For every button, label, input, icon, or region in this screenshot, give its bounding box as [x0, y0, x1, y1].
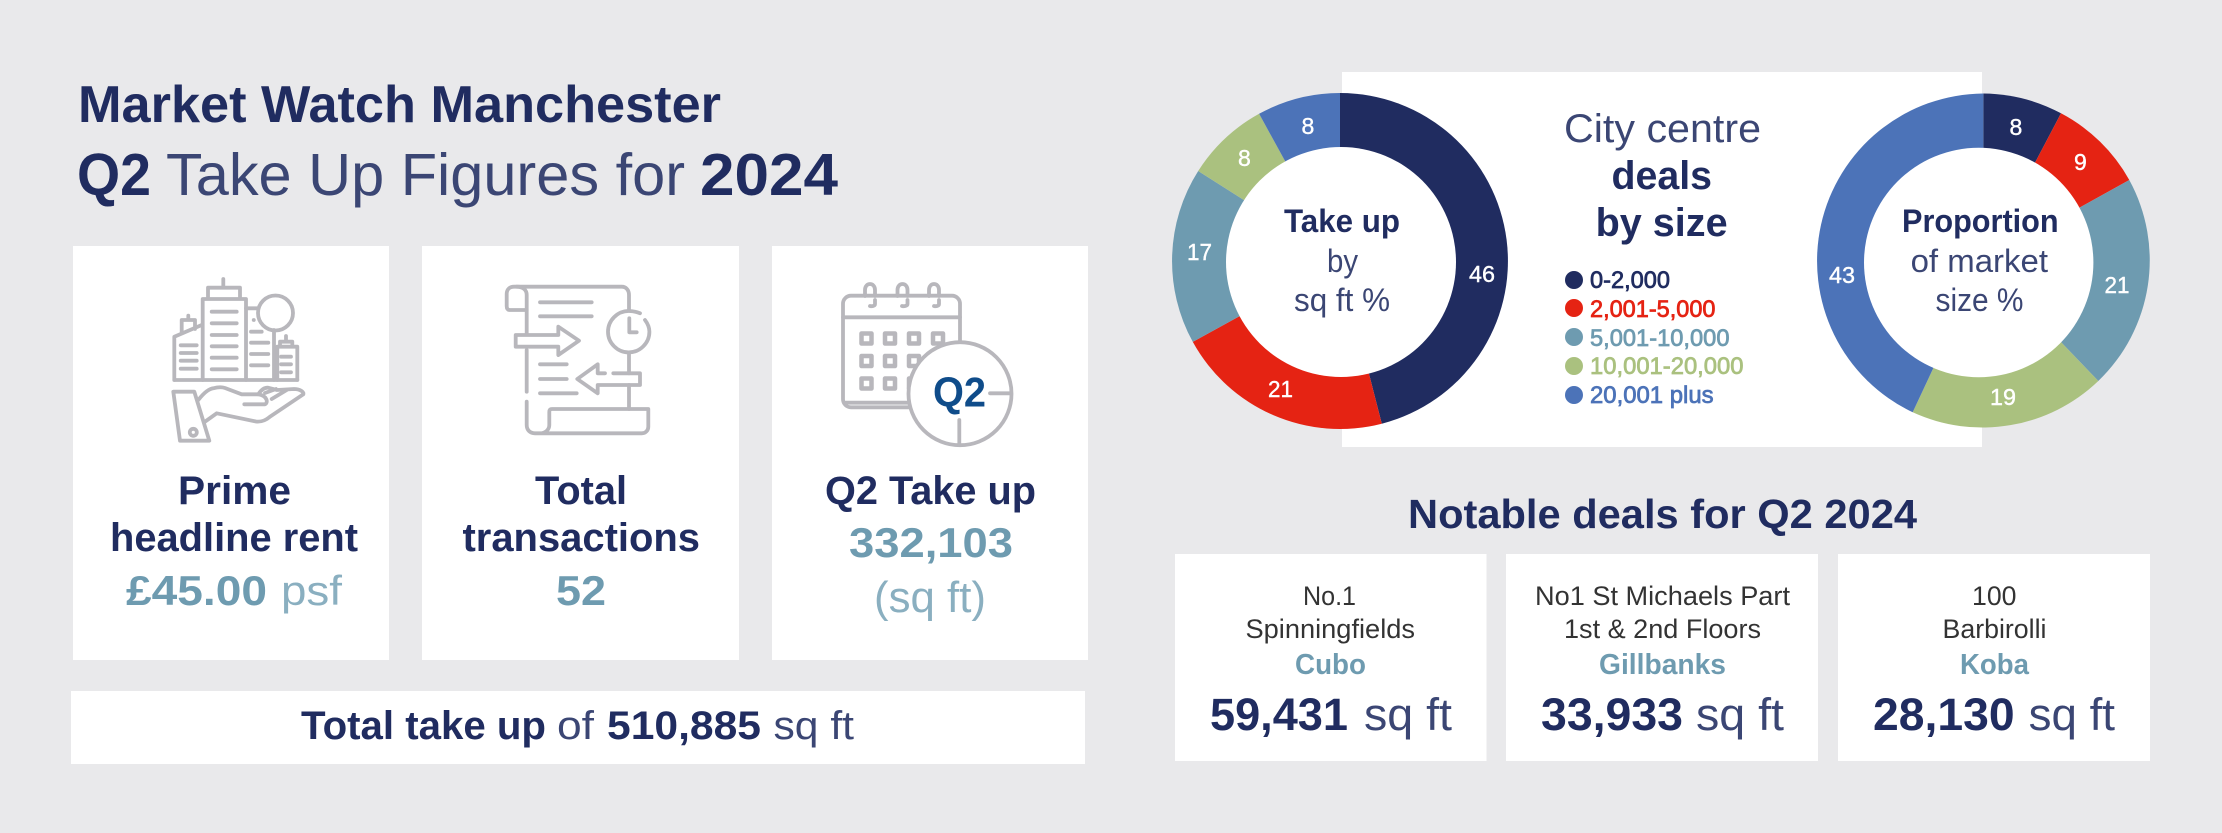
- heading: city centre deals by size: by size: [1596, 201, 1728, 245]
- donut chart: proportion of market size %: 8: [2010, 114, 2022, 140]
- icon: scroll with arrows and clock: [507, 287, 649, 433]
- donut chart: proportion of market size %: 43: [1829, 262, 1855, 288]
- icon: calendar with Q2 clock: [843, 284, 1012, 445]
- panel: prime headline rent: psf: [281, 567, 342, 614]
- panel: prime headline rent: headline rent: [110, 516, 358, 560]
- donut chart: proportion of market size %: [1817, 94, 2150, 428]
- icon: buildings on hand: [173, 279, 303, 441]
- panel: deal No.1 Spinningfields: No.1: [1303, 581, 1356, 611]
- legend: 10,001-20,000: [1590, 353, 1744, 380]
- legend: 5,001-10,000: [1590, 325, 1730, 352]
- donut chart: take up by sq ft %: 8: [1302, 113, 1314, 139]
- panel: deal No.1 Spinningfields: 59,431: [1210, 689, 1348, 740]
- panel: deal 100 Barbirolli: Barbirolli: [1942, 614, 2046, 644]
- panel: deal No.1 Spinningfields: Cubo: [1295, 649, 1366, 681]
- donut chart: take up by sq ft %: [1172, 93, 1508, 429]
- panel: Q2 take up: 332,103: [849, 519, 1013, 566]
- panel: prime headline rent: Prime: [178, 469, 291, 513]
- legend: [1565, 267, 1744, 409]
- panel: deal No1 St Michaels: sq ft: [1696, 689, 1785, 740]
- panel: deal No1 St Michaels: 1st & 2nd Floors: [1564, 614, 1761, 644]
- legend: 20,001 plus: [1590, 382, 1714, 409]
- donut chart: proportion of market size %: 19: [1990, 384, 2016, 410]
- panel: deal No.1 Spinningfields: Spinningfields: [1246, 614, 1415, 644]
- panel: Q2 take up: [772, 246, 1088, 660]
- panel: deal 100 Barbirolli: [1838, 554, 2150, 761]
- donut chart: take up by sq ft %: 17: [1187, 239, 1212, 265]
- title: Take Up Figures for: [166, 142, 685, 208]
- title: 2024: [700, 142, 838, 208]
- title: [77, 76, 838, 208]
- panel: deal No.1 Spinningfields: [1175, 554, 1486, 761]
- title: Q2: [77, 142, 151, 208]
- donut chart: proportion of market size %: 21: [2104, 272, 2130, 298]
- panel: Q2 take up: Q2: [933, 369, 986, 416]
- panel: deal No.1 Spinningfields: sq ft: [1364, 689, 1453, 740]
- legend: 2,001-5,000: [1590, 296, 1716, 323]
- panel: total transactions: [422, 246, 739, 660]
- heading: notable deals: Notable deals for Q2 2024: [1408, 491, 1917, 537]
- donut chart: proportion of market size %: Proportion: [1902, 203, 2059, 239]
- donut chart: take up by sq ft %: 21: [1268, 376, 1293, 402]
- donut chart: proportion of market size %: 9: [2074, 149, 2087, 175]
- total take up banner: 510,885: [607, 704, 761, 748]
- donut chart: take up by sq ft %: by: [1327, 243, 1358, 279]
- panel: deal 100 Barbirolli: sq ft: [2029, 689, 2115, 740]
- donut chart: take up by sq ft %: 8: [1238, 145, 1251, 171]
- panel: total transactions: Total: [535, 469, 627, 513]
- donut chart: take up by sq ft %: Take up: [1284, 203, 1400, 239]
- panel: prime headline rent: £45.00: [126, 567, 267, 614]
- total take up banner: Total take up: [301, 704, 546, 748]
- panel: deal 100 Barbirolli: 100: [1972, 581, 2016, 611]
- donut chart: take up by sq ft %: 46: [1469, 261, 1495, 287]
- panel: deal No1 St Michaels: Gillbanks: [1599, 649, 1726, 681]
- donut chart: take up by sq ft %: sq ft %: [1294, 282, 1390, 318]
- panel: deal No1 St Michaels: 33,933: [1541, 689, 1683, 740]
- total take up banner: [71, 691, 1085, 764]
- legend: 0-2,000: [1590, 267, 1670, 294]
- panel: prime headline rent: [73, 246, 389, 660]
- donut chart: proportion of market size %: size %: [1936, 282, 2024, 318]
- panel: deal 100 Barbirolli: 28,130: [1873, 689, 2015, 740]
- panel: deal No1 St Michaels: No1 St Michaels Part: [1535, 581, 1790, 611]
- panel: total transactions: 52: [556, 567, 606, 614]
- total take up banner: of: [557, 704, 595, 748]
- panel: Q2 take up: (sq ft): [874, 573, 986, 622]
- panel: deal No1 St Michaels: [1506, 554, 1818, 761]
- title: Market Watch Manchester: [78, 76, 721, 134]
- total take up banner: sq ft: [774, 704, 854, 748]
- heading: city centre deals by size: City centre: [1564, 107, 1761, 151]
- donut chart: proportion of market size %: of market: [1911, 243, 2048, 279]
- panel: total transactions: transactions: [462, 516, 700, 560]
- heading: city centre deals by size: deals: [1612, 154, 1712, 198]
- panel: deal 100 Barbirolli: Koba: [1960, 649, 2030, 681]
- heading: city centre deals by size: [1564, 107, 1761, 245]
- panel: Q2 take up: Q2 Take up: [825, 469, 1036, 513]
- panel: city centre deals by size: [1342, 72, 1982, 447]
